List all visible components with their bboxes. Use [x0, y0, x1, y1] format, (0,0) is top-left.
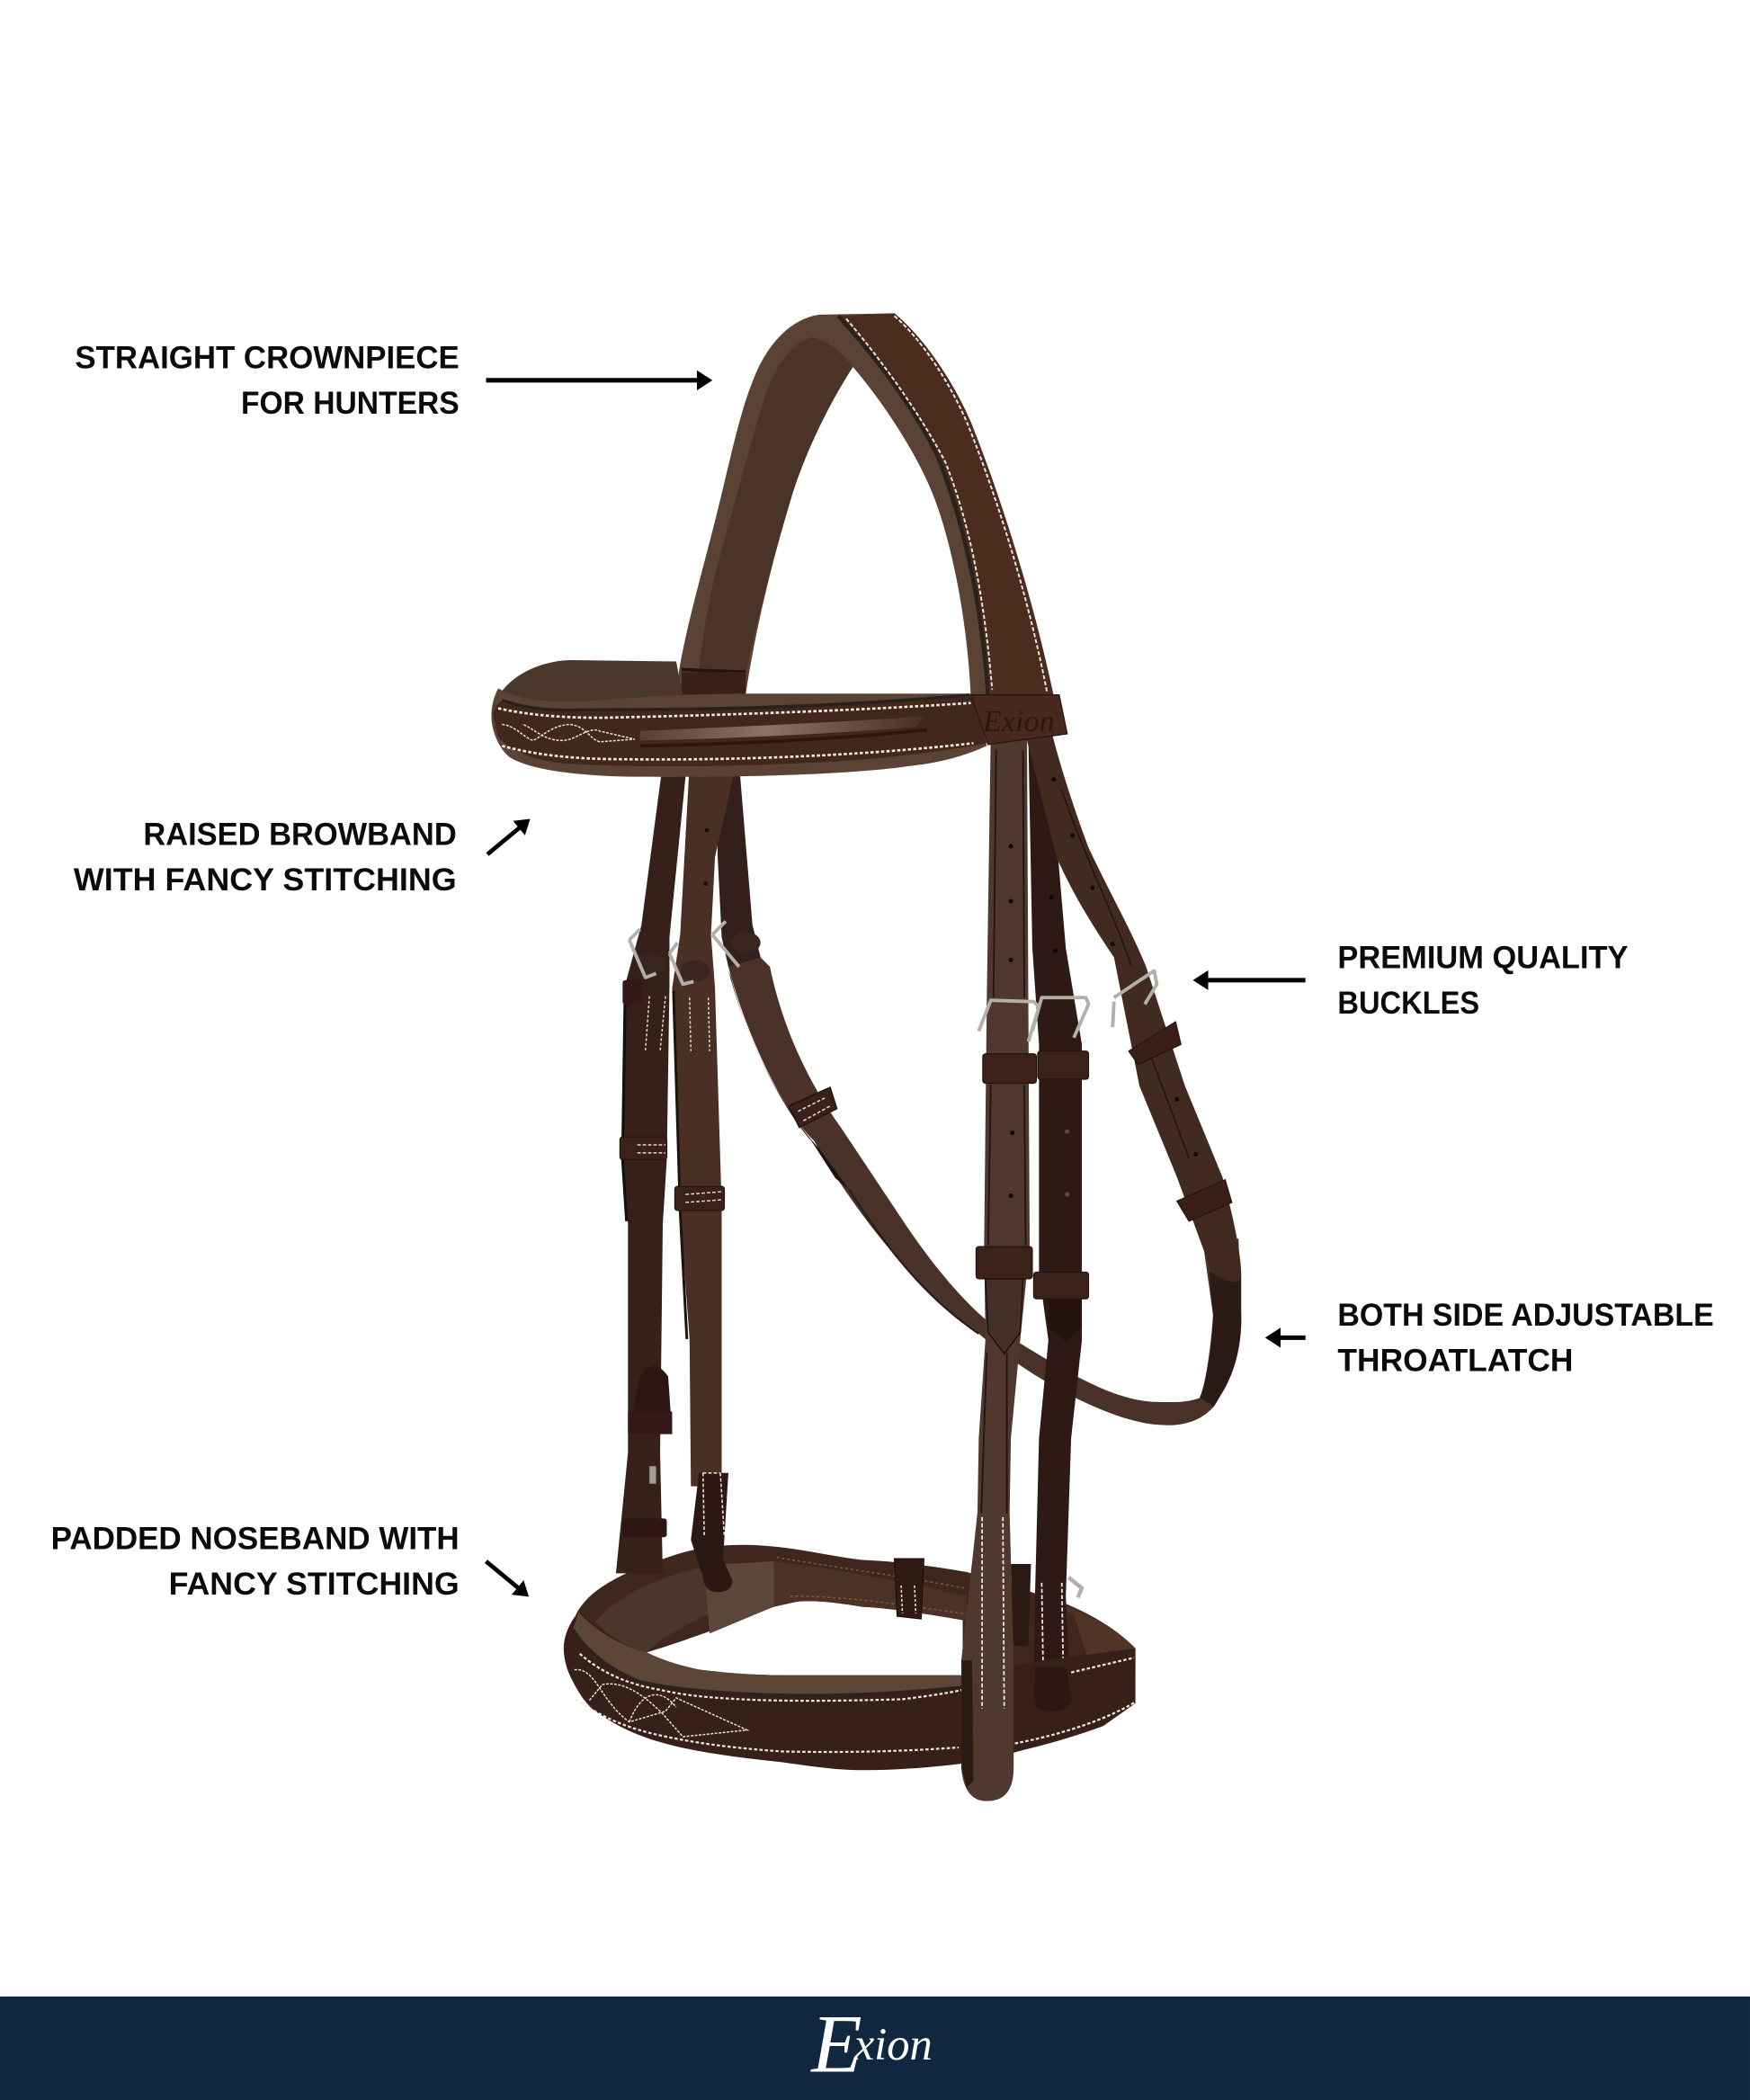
text: adjustable throatlatch: THROATLATCH — [1337, 1344, 1573, 1379]
text: premium buckles: PREMIUM QUALITY — [1337, 940, 1628, 975]
arrow: browband — [487, 822, 526, 854]
upper throatlatch strap — [1024, 729, 1241, 1282]
left cheek straps — [616, 764, 761, 1592]
browband — [491, 660, 1067, 777]
text: padded noseband: PADDED NOSEBAND WITH — [51, 1522, 460, 1557]
crownpiece — [679, 313, 1054, 696]
browband loop with logo — [970, 695, 1067, 745]
right cheek straps — [961, 729, 1241, 1801]
footer logo: E — [809, 1997, 862, 2089]
callout: adjustable throatlatch — [1271, 1298, 1714, 1379]
arrow: buckles — [1199, 979, 1306, 982]
footer logo: xion — [853, 2019, 933, 2069]
second strap rounded end — [1033, 1667, 1071, 1711]
left strap pointed tab — [691, 1473, 732, 1592]
callout: premium buckles — [1199, 940, 1628, 1021]
text: straight crownpiece: STRAIGHT CROWNPIECE — [75, 340, 460, 375]
callout: raised browband — [74, 817, 526, 898]
noseband back section — [576, 1545, 1136, 1676]
back tab — [1011, 1564, 1031, 1646]
strap C upper — [717, 764, 761, 967]
strap A — [616, 764, 687, 1573]
text: straight crownpiece: FOR HUNTERS — [241, 386, 460, 421]
second right cheek strap — [1028, 737, 1088, 1709]
noseband front — [564, 1513, 1136, 1801]
buckle keepers — [636, 932, 761, 981]
buckles — [629, 921, 1156, 1597]
callout: straight crownpiece — [75, 340, 707, 421]
noseband keeper — [895, 1559, 924, 1619]
throatlatch loop — [723, 925, 1241, 1425]
text: adjustable throatlatch: BOTH SIDE ADJUSTABLE — [1337, 1298, 1714, 1333]
noseband fancy stitching — [575, 1669, 747, 1737]
footer band with logo — [0, 1997, 1750, 2100]
strap B — [672, 764, 737, 1487]
text: premium buckles: BUCKLES — [1337, 986, 1479, 1021]
arrow: throatlatch — [1271, 1336, 1306, 1339]
text: padded noseband: FANCY STITCHING — [169, 1567, 460, 1602]
throatlatch keeper — [789, 1087, 837, 1128]
lower cheek strap overlay — [961, 1513, 1013, 1801]
bridle illustration — [491, 313, 1241, 1801]
text: raised browband: WITH FANCY STITCHING — [74, 862, 457, 898]
text: raised browband: RAISED BROWBAND — [143, 817, 457, 852]
long cheek strap — [961, 729, 1036, 1801]
browband loop with logo: Exion — [982, 704, 1055, 738]
buckle frames — [629, 921, 1156, 1597]
arrow: noseband — [486, 1561, 525, 1594]
callout: padded noseband — [51, 1522, 525, 1602]
arrow: crownpiece — [486, 379, 707, 382]
browband fancy stitching — [502, 724, 635, 742]
